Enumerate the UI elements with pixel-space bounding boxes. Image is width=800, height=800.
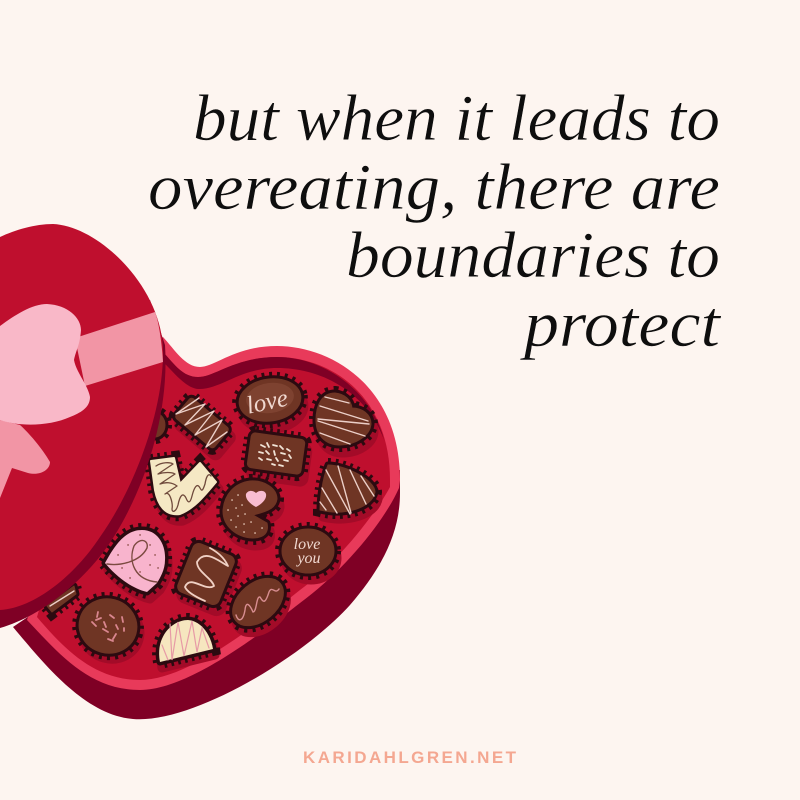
chocolate: love you oval [282,529,337,580]
chocolate: square with zigzag [176,542,239,613]
bow loop [0,304,90,425]
chocolate: heart with drizzle [316,393,374,453]
headline: boundaries to [346,219,720,292]
headline: protect [520,288,722,361]
box base side [13,470,400,719]
chocolate: white V [151,458,219,521]
chocolate: oval with pink zigzag [224,569,295,642]
chocolate: partial bar bottom left [47,586,76,612]
love script: love [244,385,290,420]
illustration: heart chocolate box [0,224,400,719]
box inner shadow band [163,352,384,440]
love you script: you [295,550,321,567]
chocolate: long bar with zigzag [174,397,233,457]
chocolate: sprinkle rectangle [247,432,308,483]
chocolate: round with sprinkles [73,592,146,666]
chocolate: pink bonbon [105,530,168,599]
footer url: KARIDAHLGREN.NET [303,748,517,767]
chocolate: white half dome [159,620,215,668]
pink heart [246,491,266,507]
headline [148,82,722,361]
box rim [27,337,400,690]
lid ribbon band [75,312,163,386]
headline: but when it leads to [193,82,720,155]
chocolate: C with pink heart [223,481,280,546]
box lid dark edge [0,300,166,628]
headline: overeating, there are [148,151,720,224]
chocolate: striped triangle heart [320,465,378,519]
chocolate: partial under lid top [145,413,165,437]
ribbon tail [0,420,50,498]
box interior [37,352,390,680]
box lid [0,224,163,610]
love you script: love [294,536,320,553]
chocolate: love oval [236,375,307,433]
